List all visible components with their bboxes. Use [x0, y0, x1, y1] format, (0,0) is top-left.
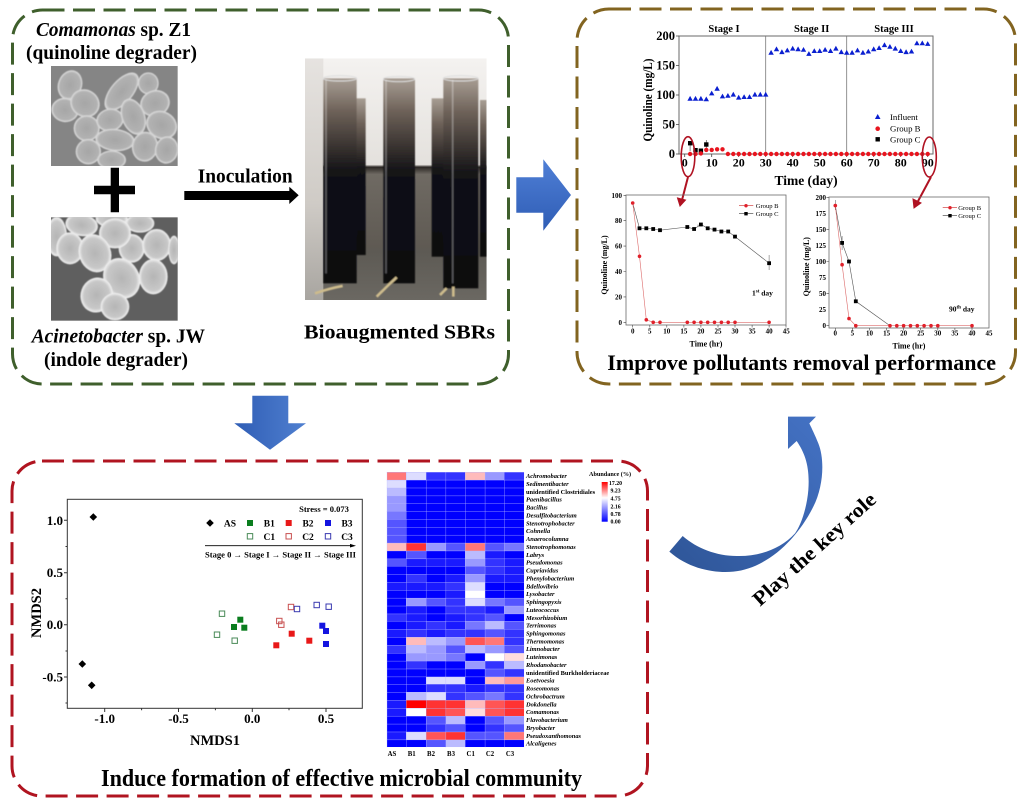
arrow: setup to performance: [516, 159, 571, 231]
column labels: C2: [486, 751, 495, 758]
chart: first day kinetics: 5: [648, 328, 652, 336]
chart: influent and effluent quinoline over time: 80: [895, 156, 907, 170]
genus labels: Limnobacter: [525, 646, 560, 653]
chart: ninetieth day kinetics: 125: [816, 242, 826, 250]
genus labels: Sedimentibacter: [526, 481, 569, 488]
chart: influent and effluent quinoline over time: Time (day): [774, 173, 838, 188]
chart: influent and effluent quinoline over time: 100: [656, 88, 675, 102]
chart: first day kinetics: [600, 192, 790, 349]
chart: first day kinetics: Quinoline (mg/L): [600, 235, 609, 295]
chart: ninetieth day kinetics: 45: [986, 330, 993, 338]
chart: first day kinetics: 20: [615, 293, 622, 301]
chart: first day kinetics: 0: [618, 319, 622, 327]
chart: ninetieth day kinetics: 5: [851, 330, 855, 338]
legend: C1: [263, 533, 275, 543]
genus labels: Cohnella: [526, 528, 551, 535]
legend: B2: [302, 520, 314, 530]
heading: Comamonas: [26, 19, 197, 64]
genus labels: Paenibacillus: [526, 497, 562, 504]
label: 1st day: 1: [752, 289, 756, 298]
label: Play the key role: Play the key role: [749, 489, 881, 611]
chart: NMDS ordination: -1.0: [94, 711, 115, 726]
points: B1: [231, 617, 247, 631]
genus labels: Achromobacter: [525, 473, 567, 480]
chart: influent and effluent quinoline over time: 50: [662, 118, 675, 132]
callout: day 1 ellipse and arrow: [678, 137, 695, 206]
chart: influent and effluent quinoline over time: 90: [922, 156, 934, 170]
chart: ninetieth day kinetics: 50: [819, 290, 826, 298]
chart: ninetieth day kinetics: 25: [917, 330, 925, 338]
chart: NMDS ordination: NMDS1: [190, 733, 240, 749]
legend: abundance colour scale: 9.23: [610, 488, 621, 494]
chart: first day kinetics: 40: [615, 268, 622, 276]
genus labels: Stenotrophomonas: [526, 544, 576, 551]
genus labels: Ochrobactrum: [526, 694, 565, 700]
genus labels: Comamonas: [526, 709, 560, 716]
heading: Bioaugmented SBRs: Bioaugmented SBRs: [304, 321, 495, 343]
panel: bioaugmentation setup: [12, 10, 508, 384]
points: AS: [78, 513, 97, 689]
callout: day 90 ellipse and arrow: [913, 137, 936, 208]
label: 90th day: 90: [949, 305, 956, 314]
arrow: curved, community to performance: [669, 417, 822, 572]
chart: NMDS ordination: 0.0: [47, 617, 63, 632]
genus labels: unidentified Clostridiales: [526, 489, 596, 496]
chart: first day kinetics: 35: [749, 328, 756, 336]
chart: NMDS ordination: NMDS2: [29, 588, 45, 638]
chart: influent and effluent quinoline over time: 10: [706, 156, 718, 170]
series: group B: [835, 206, 972, 326]
column labels: [388, 751, 515, 758]
legend: AS: [224, 520, 236, 530]
legend: Influent: [890, 112, 918, 122]
chart: ninetieth day kinetics: Time (hr): [893, 342, 926, 351]
chart: ninetieth day kinetics: 75: [819, 274, 826, 282]
chart: ninetieth day kinetics: 0: [834, 330, 838, 338]
genus labels: Bryobacter: [525, 725, 556, 732]
icon: plus sign: [94, 168, 135, 212]
points: C1: [214, 611, 237, 643]
image: Acinetobacter SEM micrograph: [51, 217, 178, 321]
chart: NMDS ordination: [29, 499, 362, 749]
legend: abundance colour scale: 0.78: [610, 512, 621, 518]
column labels: B2: [427, 751, 436, 758]
series: group C: [688, 140, 708, 153]
arrow: inoculation: [184, 187, 299, 204]
points: B2: [273, 631, 312, 648]
chart: NMDS ordination: 0.0: [244, 711, 260, 726]
heading: Improve pollutants removal performance: Improve pollutants removal performance: [607, 350, 996, 375]
chart: ninetieth day kinetics: 175: [816, 210, 826, 218]
chart: influent and effluent quinoline over time: [640, 24, 934, 188]
chart: influent and effluent quinoline over time: 200: [656, 29, 675, 43]
genus labels: [525, 473, 609, 748]
chart: ninetieth day kinetics: 0: [822, 322, 826, 330]
chart: influent and effluent quinoline over time: 50: [814, 156, 826, 170]
heading: Induce formation of effective microbial community: Induce formation of effective microbial community: [101, 766, 582, 792]
genus labels: Stenotrophobacter: [526, 520, 575, 527]
genus labels: Lysobacter: [525, 591, 555, 598]
label: 1st day: day: [759, 289, 773, 298]
chart: NMDS ordination: -0.5: [168, 711, 189, 726]
legend: abundance colour scale: Abundance (%): [589, 471, 631, 478]
genus labels: Flavobacterium: [526, 717, 568, 724]
chart: NMDS ordination: 0.5: [47, 565, 64, 580]
legend: abundance colour scale: 17.20: [609, 481, 622, 487]
chart: ninetieth day kinetics: 150: [816, 226, 826, 234]
chart: influent and effluent quinoline over time: 150: [656, 58, 675, 72]
chart: first day kinetics: 15: [680, 328, 688, 336]
legend: [943, 205, 982, 220]
image: Comamonas SEM micrograph: [50, 66, 182, 169]
column labels: AS: [388, 751, 397, 758]
chart: influent and effluent quinoline over time: 60: [841, 156, 853, 170]
chart: influent and effluent quinoline over time: 70: [868, 156, 880, 170]
genus labels: Anaerocolumna: [525, 536, 569, 543]
chart: ninetieth day kinetics: 100: [816, 258, 826, 266]
genus labels: Roseomonas: [525, 686, 560, 693]
chart: ninetieth day kinetics: Quinoline (mg/L): [802, 237, 811, 296]
series: group C: [835, 206, 890, 326]
chart: first day kinetics: 20: [697, 328, 705, 336]
legend: abundance colour scale: 2.16: [610, 504, 621, 510]
chart: influent and effluent quinoline over time: Stage II: [794, 24, 829, 35]
genus labels: Rhodanobacter: [525, 662, 567, 669]
legend: B1: [264, 520, 275, 530]
chart: influent and effluent quinoline over time: 40: [787, 156, 799, 170]
chart: ninetieth day kinetics: 35: [951, 330, 959, 338]
legend: B3: [341, 520, 353, 530]
chart: first day kinetics: 100: [612, 192, 622, 200]
chart: ninetieth day kinetics: 200: [816, 194, 826, 202]
genus labels: Eoetvoesia: [525, 678, 555, 685]
genus labels: Labrys: [525, 552, 545, 559]
column labels: B1: [408, 751, 416, 758]
chart: ninetieth day kinetics: 40: [968, 330, 976, 338]
points: B3: [319, 623, 329, 647]
genus labels: Sphingomonas: [526, 630, 566, 638]
legend: C3: [341, 533, 353, 543]
chart: ninetieth day kinetics: 20: [900, 330, 908, 338]
genus labels: unidentified Burkholderiaceae: [526, 670, 609, 677]
heading: Comamonas: (quinoline degrader): [26, 42, 197, 64]
genus labels: Dokdonella: [525, 701, 557, 708]
heading: Comamonas: Comamonas sp. Z1: [36, 19, 191, 41]
column labels: B3: [447, 751, 456, 758]
genus labels: Phenylobacterium: [526, 575, 574, 582]
legend: Stress = 0.073: [299, 504, 349, 514]
series: group B: [633, 203, 769, 322]
legend: Group C: [756, 211, 779, 218]
genus labels: Desulfitobacterium: [525, 512, 577, 520]
arrow: setup to community: [234, 396, 306, 450]
chart: NMDS ordination: 1.0: [47, 513, 63, 528]
chart: first day kinetics: 30: [732, 328, 739, 336]
chart: ninetieth day kinetics: [802, 194, 993, 351]
chart: influent and effluent quinoline over time: 0: [669, 147, 675, 161]
label: 90th day: th: [956, 306, 961, 311]
points: C2: [277, 604, 294, 627]
heading: Acinetobacter: [30, 326, 205, 371]
panel: pollutant removal performance: [577, 9, 1016, 384]
panel: microbial community: [12, 461, 648, 796]
genus labels: Luteococcus: [525, 607, 560, 614]
chart: NMDS ordination: 0.5: [318, 711, 335, 726]
label: Inoculation: Inoculation: [198, 166, 293, 188]
heading: Acinetobacter: Acinetobacter sp. JW: [30, 326, 205, 348]
chart: first day kinetics: 60: [615, 243, 622, 251]
chart: influent and effluent quinoline over time: Stage III: [874, 24, 914, 35]
legend: Group B: [756, 203, 779, 210]
chart: first day kinetics: Time (hr): [690, 340, 723, 349]
label: 1st day: st: [756, 290, 760, 295]
legend: [739, 203, 779, 218]
genus labels: Bacillus: [525, 505, 548, 512]
legend: C2: [302, 533, 314, 543]
heading: Acinetobacter: (indole degrader): [44, 349, 188, 371]
genus labels: Mesorhizobium: [525, 615, 567, 622]
chart: genus abundance heatmap: [387, 471, 631, 758]
chart: influent and effluent quinoline over time: Quinoline (mg/L): [640, 58, 655, 142]
genus labels: Cupriavidus: [526, 568, 559, 574]
label: 90th day: day: [961, 305, 975, 314]
genus labels: Pseudomonas: [526, 560, 563, 567]
chart: first day kinetics: 80: [615, 217, 622, 225]
chart: ninetieth day kinetics: 25: [819, 306, 826, 314]
image: SBR reactor photo: [305, 58, 487, 300]
legend: [205, 504, 356, 560]
series: group C: [633, 203, 769, 263]
legend: Group C: [958, 213, 982, 220]
chart: NMDS ordination: -0.5: [42, 670, 63, 684]
legend: Group B: [890, 124, 921, 134]
genus labels: Thermomonas: [526, 638, 565, 645]
legend: abundance colour scale: 0.00: [610, 520, 621, 526]
series: influent: [690, 43, 928, 99]
chart: first day kinetics: 40: [766, 328, 773, 336]
points: C3: [294, 602, 331, 612]
chart: first day kinetics: 45: [783, 328, 790, 336]
series: group B: [688, 147, 928, 156]
chart: ninetieth day kinetics: 15: [883, 330, 891, 338]
chart: influent and effluent quinoline over time: 20: [733, 156, 745, 170]
genus labels: Terrimonas: [526, 623, 557, 630]
genus labels: Sphingopyxis: [526, 599, 562, 606]
genus labels: Pseudoxanthomonas: [526, 733, 582, 740]
chart: influent and effluent quinoline over time: 30: [760, 156, 772, 170]
chart: first day kinetics: 25: [714, 328, 722, 336]
genus labels: Luteimonas: [525, 654, 558, 661]
chart: influent and effluent quinoline over time: 0: [682, 156, 688, 170]
column labels: C1: [467, 751, 475, 758]
legend: abundance colour scale: 4.75: [610, 496, 621, 502]
column labels: C3: [506, 751, 515, 758]
chart: first day kinetics: 0: [631, 328, 635, 336]
chart: influent and effluent quinoline over time: Stage I: [708, 24, 740, 35]
legend: [875, 112, 921, 144]
legend: Group C: [890, 134, 921, 144]
chart: first day kinetics: 10: [663, 328, 671, 336]
chart: ninetieth day kinetics: 30: [934, 330, 942, 338]
legend: Stage 0 → Stage I → Stage II → Stage III: [205, 550, 356, 560]
legend: abundance colour scale: [589, 471, 631, 526]
legend: Group B: [958, 205, 982, 212]
genus labels: Alcaligenes: [525, 741, 557, 748]
genus labels: Bdellovibrio: [525, 583, 558, 590]
chart: ninetieth day kinetics: 10: [866, 330, 874, 338]
